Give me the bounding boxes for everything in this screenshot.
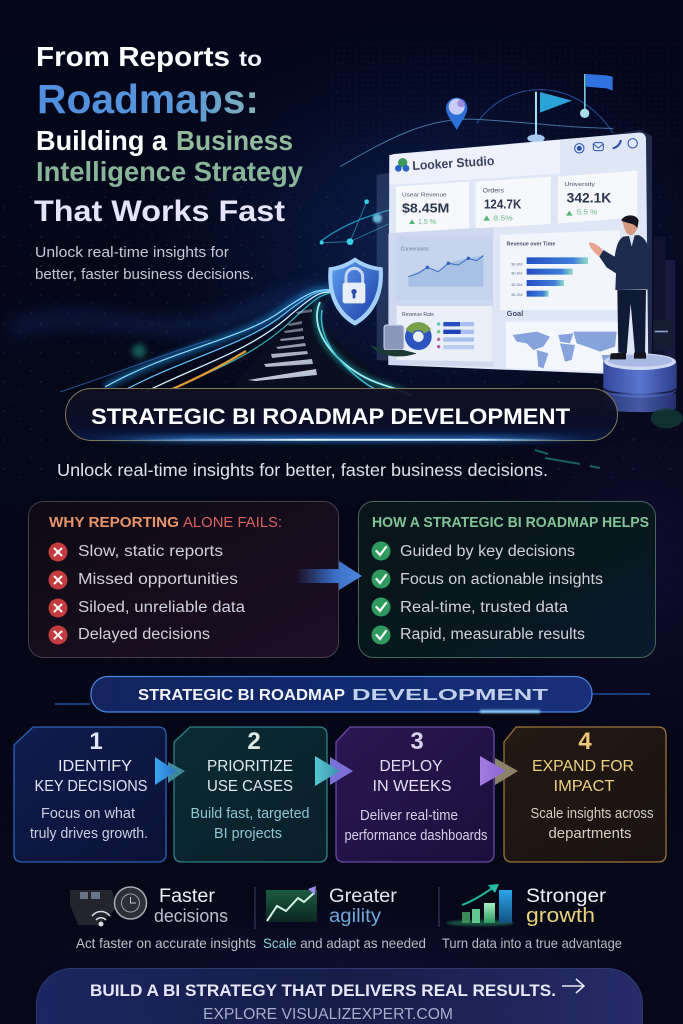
- line chart: [396, 237, 492, 300]
- step 4: expand for impact: departments: [548, 826, 632, 842]
- step 4: expand for impact: 4: [578, 728, 592, 755]
- subtitle: Unlock real-time insights for: [35, 245, 229, 261]
- call to action: [36, 968, 642, 1024]
- step 3: deploy in weeks: Deliver real-time: [360, 808, 458, 824]
- KPI: revenue: 1.5 %: [418, 219, 436, 226]
- back panel: [377, 130, 652, 375]
- step 1: identify key decisions: IDENTIFY: [58, 758, 132, 775]
- step 1: identify key decisions: KEY DECISIONS: [34, 778, 148, 795]
- benefit: faster decisions: decisions: [154, 906, 228, 926]
- step 2: prioritize use cases: PRIORITIZE: [207, 758, 293, 775]
- title: to: [239, 48, 262, 71]
- bar chart: revenue over time: $0.5M: [511, 282, 522, 287]
- pedestal: [603, 353, 683, 428]
- benefit: stronger growth: growth: [526, 905, 595, 927]
- benefit: faster decisions: Faster: [159, 886, 216, 907]
- benefit: stronger growth: [442, 884, 622, 951]
- bar chart: revenue over time: $0.8M: [511, 261, 522, 266]
- benefit: greater agility: [263, 886, 426, 951]
- heading: why reporting alone fails: WHY REPORTING: [49, 515, 179, 531]
- subtitle: [35, 245, 254, 283]
- step 3: deploy in weeks: [336, 727, 494, 862]
- icon: rising line chart: [266, 886, 317, 922]
- step 2: prioritize use cases: USE CASES: [207, 778, 293, 795]
- step 4: expand for impact: Scale insights across: [530, 806, 654, 822]
- donut panel: [397, 306, 493, 362]
- banner: strategic BI roadmap development: [66, 388, 618, 441]
- list: benefits: Focus on actionable insights: [400, 571, 603, 588]
- title: From Reports: [36, 41, 230, 72]
- bar chart: revenue over time: Revenue over Time: [507, 241, 555, 247]
- map pin: [446, 98, 467, 130]
- KPI: university: [558, 171, 637, 223]
- KPI: revenue: Usear Revenue: [402, 193, 447, 199]
- KPI: orders: 124.7K: [484, 196, 522, 211]
- KPI: university: 342.1K: [567, 190, 611, 206]
- step 3: deploy in weeks: DEPLOY: [380, 758, 443, 775]
- icon: bar chart with arrow: [446, 884, 514, 926]
- step 2: prioritize use cases: 2: [247, 728, 261, 755]
- step 2: prioritize use cases: [174, 727, 327, 862]
- panel: why reporting alone fails: [28, 502, 338, 658]
- dashboard window: [370, 133, 648, 374]
- list: failures: [48, 542, 245, 644]
- step 4: expand for impact: EXPAND FOR: [532, 758, 634, 775]
- KPI: revenue: [396, 182, 469, 233]
- step 3: deploy in weeks: 3: [410, 728, 424, 755]
- list: benefits: [372, 542, 603, 644]
- list: benefits: Rapid, measurable results: [400, 626, 585, 643]
- businessman presenting: [589, 215, 651, 359]
- arrow: step 1 to 2: [155, 757, 185, 785]
- arrow: step 3 to 4: [480, 756, 518, 786]
- arrow: step 2 to 3: [315, 756, 353, 786]
- bar chart: revenue over time: $0.6M: [511, 271, 522, 276]
- benefit: greater agility: Scale and adapt as needed: [263, 935, 426, 951]
- step 1: identify key decisions: 1: [89, 728, 103, 755]
- list: failures: Siloed, unreliable data: [78, 599, 245, 616]
- call to action: BUILD A BI STRATEGY THAT DELIVERS REAL RESULTS.: [90, 982, 556, 1000]
- benefit: stronger growth: Turn data into a true advantage: [442, 935, 622, 951]
- logo and product name: Looker Studio: [412, 154, 495, 173]
- world map: Goal: [507, 309, 523, 318]
- list: benefits: Real-time, trusted data: [400, 599, 568, 616]
- step 2: prioritize use cases: Build fast, targeted: [190, 806, 310, 822]
- shield with padlock: [328, 257, 383, 326]
- hero illustration: dashboard scene: [320, 74, 683, 428]
- list: benefits: Guided by key decisions: [400, 543, 575, 560]
- road with light streams: [10, 288, 600, 468]
- heading: how a roadmap helps: HOW A STRATEGIC BI ROADMAP HELPS: [372, 515, 649, 531]
- heading: why reporting alone fails: [49, 515, 282, 531]
- call to action: EXPLORE VISUALIZEXPERT.COM: [203, 1006, 453, 1023]
- KPI: university: University: [564, 182, 595, 188]
- step 4: expand for impact: IMPACT: [554, 778, 615, 795]
- arrow: from reporting to roadmap: [295, 561, 362, 590]
- benefit: faster decisions: Act faster on accurate insights: [76, 935, 256, 951]
- route arcs: [320, 90, 613, 245]
- panel: how a strategic BI roadmap helps: [358, 502, 656, 658]
- benefit: stronger growth: Stronger: [526, 886, 607, 907]
- title: Business: [176, 125, 293, 156]
- tagline: Unlock real-time insights for better, faster business decisions.: [57, 460, 548, 480]
- KPI: orders: Orders: [483, 188, 504, 195]
- bar chart: revenue over time: $0.3M: [511, 292, 522, 297]
- heading: why reporting alone fails: ALONE FAILS:: [183, 515, 282, 531]
- section banner: roadmap development: STRATEGIC BI ROADMAP: [138, 687, 345, 704]
- bar chart: revenue over time: [500, 230, 620, 310]
- list: failures: Missed opportunities: [78, 571, 238, 588]
- KPI: orders: 8.5%: [493, 216, 513, 223]
- benefit: greater agility: agility: [329, 906, 382, 927]
- flag: teal: [527, 92, 572, 142]
- battery device: [370, 325, 417, 356]
- list: failures: Delayed decisions: [78, 626, 210, 643]
- KPI: university: 5.5 %: [577, 210, 597, 217]
- title: Building a: [36, 125, 167, 156]
- benefit: greater agility: Greater: [329, 886, 398, 907]
- toolbar icons: [575, 139, 637, 153]
- city skyline: [653, 237, 675, 363]
- step 2: prioritize use cases: BI projects: [214, 826, 282, 842]
- section banner: roadmap development: [55, 676, 650, 713]
- title: That Works Fast: [34, 195, 285, 228]
- title: [34, 41, 303, 228]
- title: Intelligence Strategy: [36, 156, 303, 187]
- step 1: identify key decisions: Focus on what: [41, 806, 135, 822]
- flag: blue: [580, 74, 613, 118]
- icon: arrow: [562, 979, 584, 993]
- step 1: identify key decisions: [14, 727, 166, 862]
- donut panel: Revenue Rate: [402, 312, 434, 318]
- step 3: deploy in weeks: IN WEEKS: [372, 778, 452, 795]
- line chart: Conversions: [401, 247, 429, 253]
- list: failures: Slow, static reports: [78, 543, 223, 560]
- KPI: revenue: $8.45M: [402, 201, 449, 216]
- world map: [506, 309, 618, 372]
- icon: clock and signal: [70, 887, 146, 926]
- KPI: orders: [476, 177, 551, 228]
- step 4: expand for impact: [504, 727, 666, 862]
- section banner: roadmap development: DEVELOPMENT: [352, 687, 548, 704]
- step 3: deploy in weeks: performance dashboards: [344, 828, 488, 844]
- subtitle: better, faster business decisions.: [35, 267, 254, 283]
- benefit: faster decisions: [70, 886, 256, 951]
- banner: strategic BI roadmap development: STRATEGIC BI ROADMAP DEVELOPMENT: [91, 404, 570, 429]
- title: Roadmaps:: [37, 76, 259, 122]
- step 1: identify key decisions: truly drives growth.: [30, 826, 148, 842]
